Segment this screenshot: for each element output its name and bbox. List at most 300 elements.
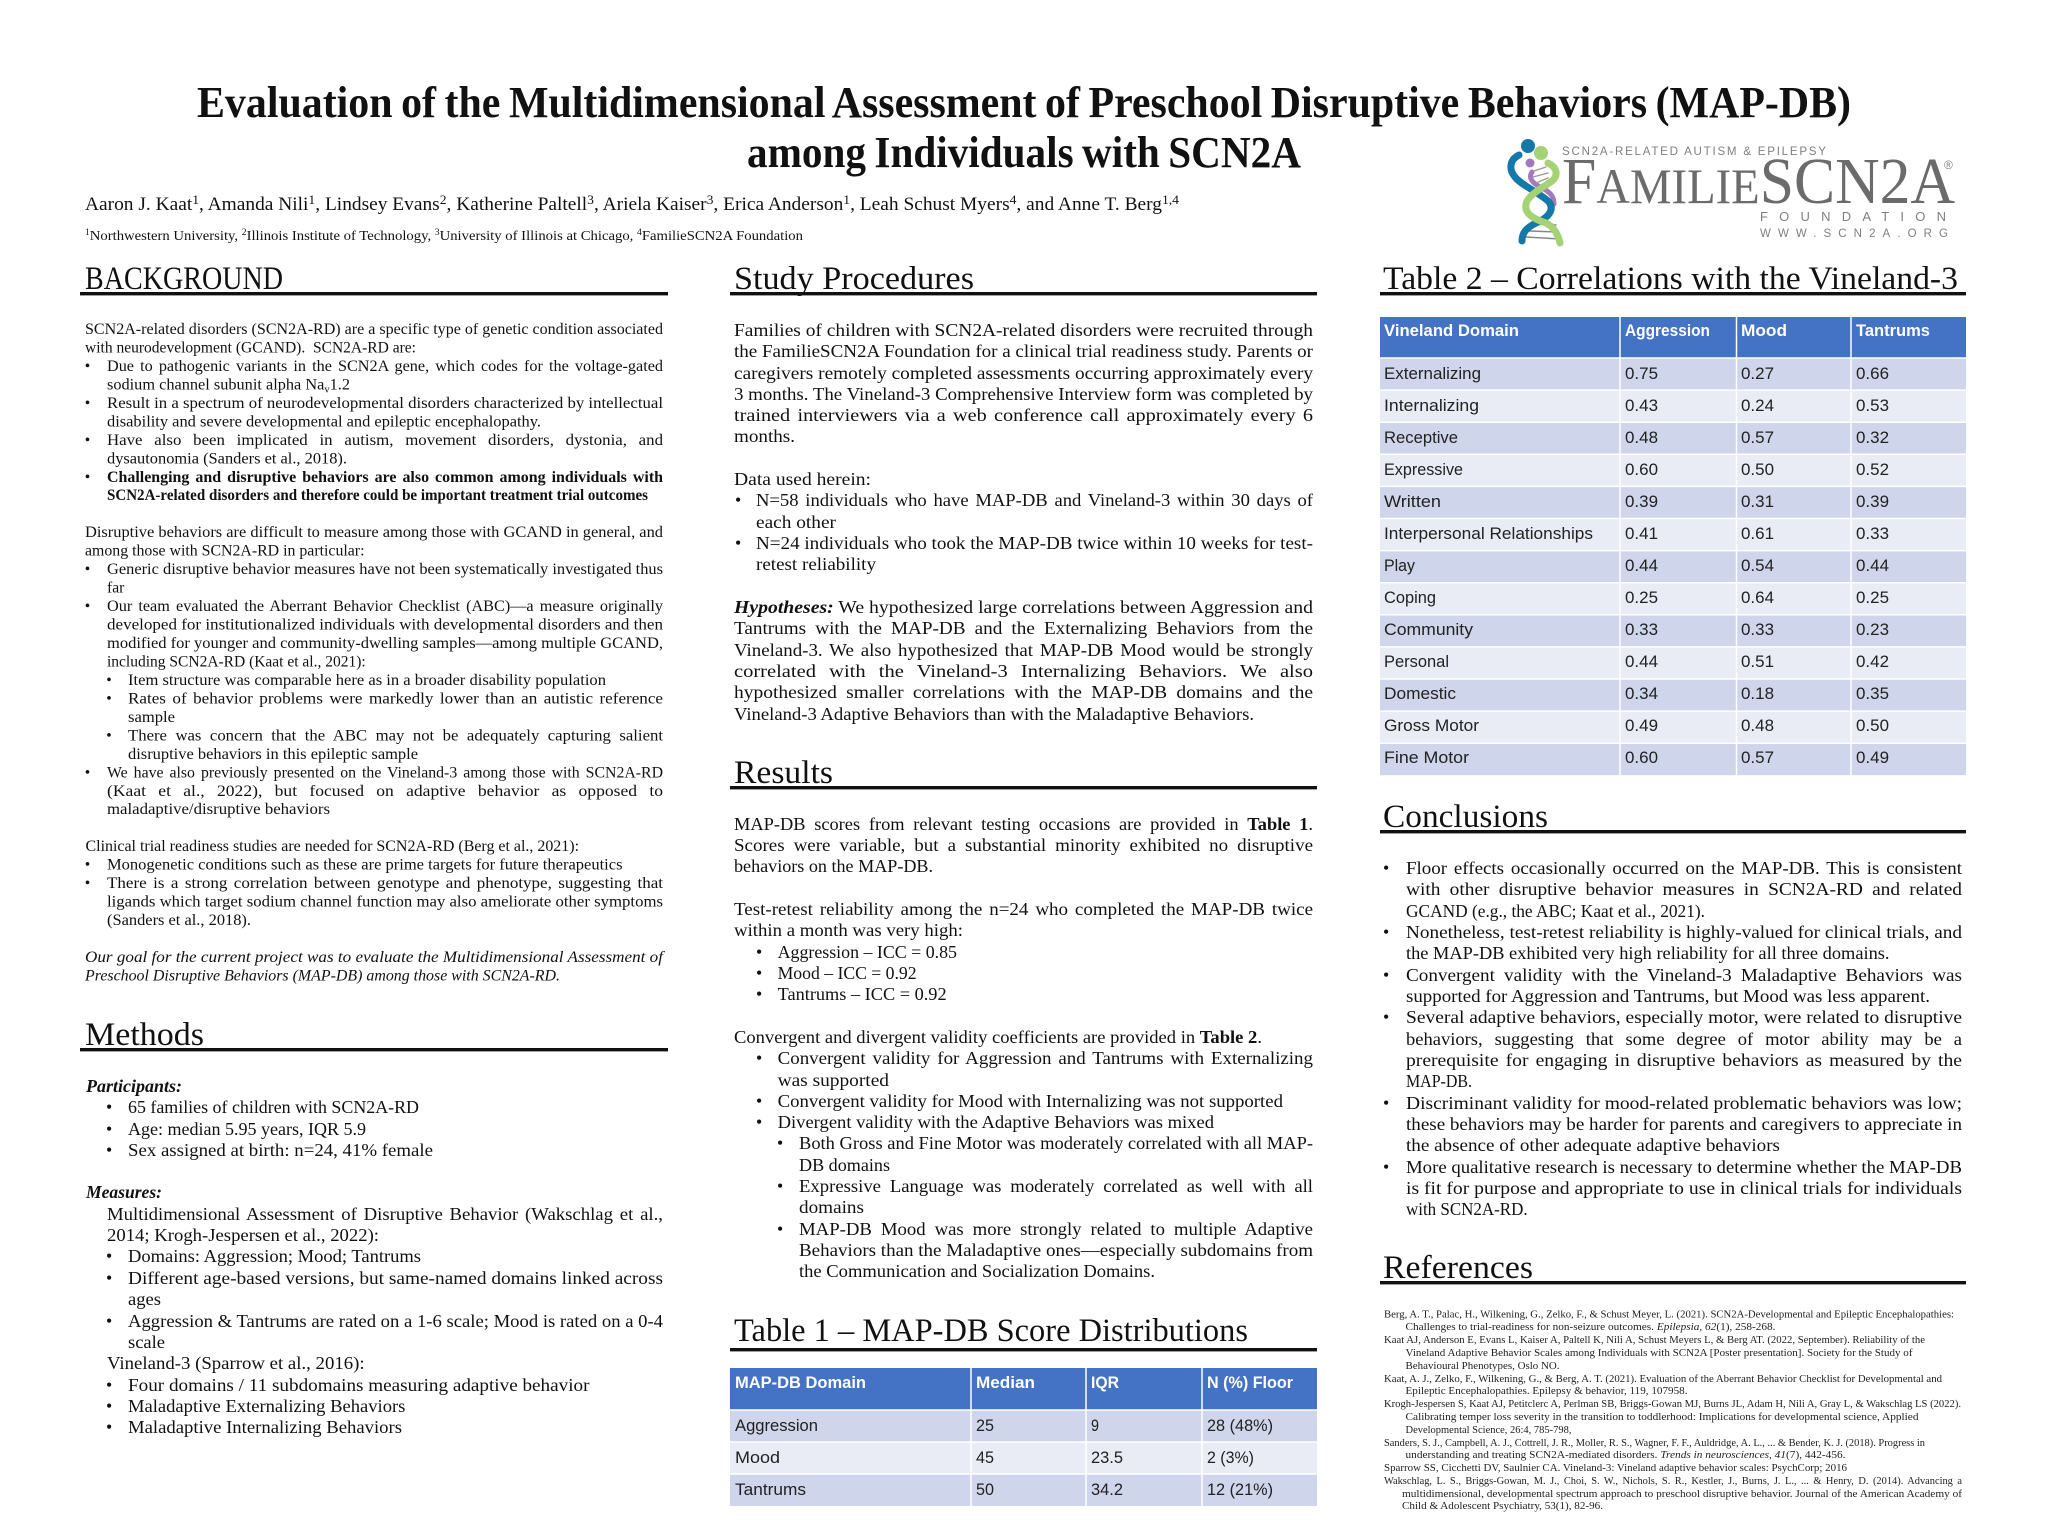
table: correlations with the Vineland-3: 0.18	[1741, 684, 1774, 703]
text block: test-retest reliability: Aggression – ICC = 0.85	[778, 942, 957, 962]
table: correlations with the Vineland-3: 0.43	[1625, 396, 1658, 415]
authors: 1	[308, 192, 315, 207]
text block: reference list: Behavioural Phenotypes, Oslo NO.	[1406, 1360, 1560, 1372]
heading: background: BACKGROUND	[85, 261, 283, 297]
text block: conclusions list: the MAP-DB exhibited very high reliability for all three domains.	[1406, 943, 1890, 963]
text block: reference list: Calibrating temper loss severity in the transition to toddlerhood: Implications for developmental science, Applied	[1406, 1411, 1919, 1423]
text block: measuring disruptive behaviors: •	[85, 764, 90, 781]
text block: conclusions list: supported for Aggression and Tantrums, but Mood was less apparent.	[1406, 986, 1930, 1006]
text block: conclusions list: •	[1383, 858, 1389, 878]
table: correlations with the Vineland-3: 0.49	[1856, 748, 1889, 767]
text block: SCN2A-RD overview: v	[324, 384, 330, 395]
text block: SCN2A-RD overview: with neurodevelopment (GCAND). SCN2A-RD are:	[85, 340, 416, 356]
logo: FamilieSCN2A Foundation	[1511, 139, 1955, 243]
affiliations: 3	[435, 227, 440, 237]
text block: reference list: Krogh-Jespersen S, Kaat AJ, Petitclerc A, Perlman SB, Briggs-Gowan MJ, Burns JL, Adam H, Nili A, Gray L, & Wakschlag LS (2022).	[1384, 1398, 1961, 1410]
text block: test-retest reliability: Test-retest reliability among the n=24 who completed the MAP-DB twice	[734, 899, 1313, 919]
text block: measures: •	[106, 1375, 112, 1395]
text block: project goal: Our goal for the current project was to evaluate the Multidimensional Assessment of	[85, 949, 666, 966]
text block: reference list: Epileptic Encephalopathies. Epilepsy & behavior, 119, 107958.	[1406, 1385, 1688, 1397]
authors: , Erica Anderson	[713, 195, 843, 215]
text block: validity coefficients: Convergent validity for Aggression and Tantrums with Externalizing	[778, 1048, 1313, 1068]
authors: Aaron J. Kaat	[85, 195, 187, 215]
heading: background	[80, 261, 668, 297]
text block: reference list: Challenges to trial-readiness for non-seizure outcomes. Epilepsia, 62(1), 258-268.	[1406, 1321, 1776, 1333]
text block: measuring disruptive behaviors: •	[106, 672, 112, 689]
text block: test-retest reliability: Mood – ICC = 0.92	[778, 963, 917, 983]
table: correlations with the Vineland-3: 0.48	[1625, 428, 1658, 447]
authors: 1	[843, 192, 850, 207]
text block: conclusions list	[1383, 858, 1962, 1219]
text block: SCN2A-RD overview: •	[85, 469, 90, 486]
text block: SCN2A-RD overview: •	[85, 432, 90, 449]
text block: conclusions list: behaviors, suggesting that some degree of motor ability may be a	[1406, 1029, 1962, 1049]
text block: measuring disruptive behaviors: modified for younger and community-dwelling samples—among multiple GCAND,	[107, 635, 663, 652]
text block: study description: caregivers remotely completed assessments occurring approximately every	[734, 363, 1313, 383]
text block: participants: Age: median 5.95 years, IQR 5.9	[128, 1119, 366, 1139]
affiliations: University of Illinois at Chicago,	[440, 228, 637, 243]
logo wordmark: FAMILIESCN2A	[1562, 145, 1955, 218]
table: correlations with the Vineland-3: Coping	[1384, 588, 1436, 607]
panel: background	[80, 261, 668, 984]
text block: validity coefficients: Divergent validity with the Adaptive Behaviors was mixed	[778, 1112, 1214, 1132]
table: correlations with the Vineland-3: Community	[1384, 620, 1474, 639]
text block: test-retest reliability: Tantrums – ICC = 0.92	[778, 984, 947, 1004]
table: correlations with the Vineland-3: Mood	[1741, 321, 1787, 340]
text block: measuring disruptive behaviors: developed for institutionalized individuals with developmental disorders and then	[107, 616, 663, 634]
text block: measuring disruptive behaviors: •	[106, 690, 112, 707]
table: MAP-DB score distributions: 50	[976, 1480, 994, 1499]
table: correlations with the Vineland-3: 0.57	[1741, 748, 1774, 767]
text block: data used	[734, 469, 1313, 574]
text block: validity coefficients	[734, 1027, 1313, 1281]
text block: SCN2A-RD overview: disability and severe developmental and epileptic encephalopathy.	[107, 413, 541, 430]
text block: SCN2A-RD overview: SCN2A-related disorders and therefore could be important treatment trial outcomes	[107, 487, 648, 504]
text block: reference list: Wakschlag, L. S., Briggs-Gowan, M. J., Choi, S. W., Nichols, S. R., Kestler, J., Burns, J. L., ... & Henry, D. (2014). Advancing a	[1384, 1475, 1962, 1487]
text block: conclusions list: •	[1383, 965, 1389, 985]
text block: reference list: Kaat, A. J., Zelko, F., Wilkening, G., & Berg, A. T. (2021). Evaluation of the Aberrant Behavior Checklist for Developmental and	[1384, 1373, 1942, 1385]
affiliations	[85, 227, 803, 243]
text block: project goal	[84, 949, 666, 984]
text block: measures: •	[106, 1311, 112, 1331]
text block: study description: the FamilieSCN2A Foundation for a clinical trial readiness study. Parents or	[734, 341, 1313, 361]
text block: conclusions list: Floor effects occasionally occurred on the MAP-DB. This is consistent	[1406, 858, 1962, 878]
text block: measuring disruptive behaviors: Item structure was comparable here as in a broader disability population	[128, 672, 606, 689]
text block: validity coefficients: domains	[799, 1197, 864, 1217]
title	[197, 78, 1851, 177]
text block: reference list: Sparrow SS, Cicchetti DV, Saulnier CA. Vineland-3: Vineland adaptive behavior scales: PsychCorp; 2016	[1384, 1462, 1847, 1474]
table: correlations with the Vineland-3: Interpersonal Relationships	[1384, 524, 1593, 543]
table: correlations with the Vineland-3: 0.49	[1625, 716, 1658, 735]
text block: participants: Participants:	[85, 1076, 182, 1096]
text block: measures: scale	[128, 1332, 165, 1352]
text block: test-retest reliability: •	[756, 963, 762, 983]
table: MAP-DB score distributions: 2 (3%)	[1207, 1448, 1254, 1467]
table: correlations with the Vineland-3: Personal	[1384, 652, 1449, 671]
table: correlations with the Vineland-3: Receptive	[1384, 428, 1458, 447]
table: correlations with the Vineland-3: Domestic	[1384, 684, 1456, 703]
heading: study procedures: Study Procedures	[734, 261, 974, 297]
text block: measuring disruptive behaviors: •	[106, 727, 112, 744]
table: correlations with the Vineland-3: 0.27	[1741, 364, 1774, 383]
heading: references	[1380, 1250, 1966, 1286]
table: correlations with the Vineland-3: 0.61	[1741, 524, 1774, 543]
text block: measuring disruptive behaviors: Rates of behavior problems were markedly lower than an autistic reference	[128, 690, 663, 707]
text block: reference list: multidimensional, developmental spectrum approach to preschool disruptive behavior. Journal of the American Academy of	[1402, 1488, 1962, 1500]
text block: measures: •	[106, 1246, 112, 1266]
table: correlations with the Vineland-3: 0.23	[1856, 620, 1889, 639]
text block: measuring disruptive behaviors: •	[85, 561, 90, 578]
text block: validity coefficients: •	[756, 1091, 762, 1111]
table: correlations with the Vineland-3: 0.35	[1856, 684, 1889, 703]
text block: measuring disruptive behaviors: among those with SCN2A-RD in particular:	[85, 543, 364, 560]
text block: data used: each other	[756, 512, 836, 532]
text block: SCN2A-RD overview	[85, 321, 664, 504]
text block: measures: Aggression & Tantrums are rated on a 1-6 scale; Mood is rated on a 0-4	[128, 1311, 663, 1331]
text block: measuring disruptive behaviors: Our team evaluated the Aberrant Behavior Checklist (ABC)—a measure originally	[107, 598, 663, 615]
text block: conclusions list: •	[1383, 922, 1389, 942]
text block: validity coefficients: Behaviors than the Maladaptive ones—especially subdomains from	[799, 1240, 1313, 1260]
affiliations: 1	[85, 227, 90, 237]
table: correlations with the Vineland-3: Internalizing	[1384, 396, 1479, 415]
text block: data used: N=24 individuals who took the MAP-DB twice within 10 weeks for test-	[756, 533, 1313, 553]
text block: measures	[85, 1182, 663, 1437]
text block: validity coefficients: the Communication and Socialization Domains.	[799, 1261, 1155, 1281]
panel: study procedures	[730, 261, 1317, 724]
text block: measures: 2014; Krogh-Jespersen et al., 2022):	[107, 1225, 379, 1246]
table: MAP-DB score distributions	[730, 1368, 1317, 1506]
table: correlations with the Vineland-3: 0.53	[1856, 396, 1889, 415]
text block: SCN2A-RD overview: Challenging and disruptive behaviors are also common among individuals with	[107, 469, 663, 486]
table: correlations with the Vineland-3: Gross Motor	[1384, 716, 1479, 735]
text block: conclusions list: More qualitative research is necessary to determine whether the MAP-DB	[1406, 1157, 1962, 1177]
heading: conclusions	[1380, 799, 1966, 835]
text block: measures: Maladaptive Externalizing Behaviors	[128, 1396, 405, 1416]
text block: conclusions list: is fit for purpose and appropriate to use in clinical trials for individuals	[1406, 1178, 1962, 1198]
text block: measuring disruptive behaviors: We have also previously presented on the Vineland-3 among those with SCN2A-RD	[107, 764, 663, 781]
logo registered mark: ®	[1944, 158, 1953, 172]
table: correlations with the Vineland-3: Expressive	[1384, 460, 1463, 479]
text block: test-retest reliability: within a month was very high:	[734, 920, 963, 940]
table: correlations with the Vineland-3: 0.44	[1625, 652, 1658, 671]
text block: conclusions list: •	[1383, 1093, 1389, 1113]
text block: data used: •	[735, 490, 741, 510]
affiliations: FamilieSCN2A Foundation	[642, 228, 803, 243]
text block: hypotheses: correlated with the Vineland-3 Internalizing Behaviors. We also	[734, 661, 1313, 681]
text block: validity coefficients: DB domains	[799, 1155, 890, 1175]
text block: conclusions list: with SCN2A-RD.	[1406, 1199, 1528, 1219]
text block: reference list: Kaat AJ, Anderson E, Evans L, Kaiser A, Paltell K, Nili A, Schust Meyers L, & Berg AT. (2022, September). Reliability of the	[1384, 1334, 1925, 1346]
text block: validity coefficients: •	[777, 1219, 783, 1239]
text block: participants: 65 families of children with SCN2A-RD	[128, 1097, 419, 1117]
authors: 1,4	[1162, 192, 1180, 207]
table: correlations with the Vineland-3: Aggression	[1625, 321, 1710, 340]
text block: study description: months.	[734, 426, 795, 446]
text block: hypotheses: Hypotheses: We hypothesized large correlations between Aggression and	[733, 597, 1313, 617]
text block: conclusions list: Discriminant validity for mood-related problematic behaviors was low;	[1406, 1093, 1962, 1113]
text block: validity coefficients: Both Gross and Fine Motor was moderately correlated with all MAP-	[799, 1133, 1313, 1153]
authors	[85, 192, 1180, 215]
logo foundation line: FOUNDATION	[1760, 209, 1946, 224]
authors: , Lindsey Evans	[315, 195, 440, 215]
text block: participants: •	[106, 1140, 112, 1160]
text block: clinical trial readiness: ligands which target sodium channel function may also ameliorate other symptoms	[107, 894, 663, 911]
table: correlations with the Vineland-3: 0.48	[1741, 716, 1774, 735]
table: correlations with the Vineland-3: 0.25	[1625, 588, 1658, 607]
table: correlations with the Vineland-3: 0.39	[1856, 492, 1889, 511]
text block: measures: Four domains / 11 subdomains measuring adaptive behavior	[128, 1375, 590, 1395]
text block: validity coefficients: Expressive Language was moderately correlated as well with all	[799, 1176, 1313, 1196]
text block: conclusions list: the absence of other adequate adaptive behaviors	[1406, 1135, 1780, 1155]
table: correlations with the Vineland-3: Vineland Domain	[1384, 321, 1519, 340]
text block: clinical trial readiness: (Sanders et al., 2018).	[107, 912, 251, 929]
text block: hypotheses: Tantrums with the MAP-DB and the Externalizing Behaviors from the	[734, 618, 1313, 638]
text block: validity coefficients: MAP-DB Mood was more strongly related to multiple Adaptive	[799, 1219, 1313, 1239]
authors: , Leah Schust Myers	[850, 195, 1010, 215]
panel: table 1	[730, 1313, 1317, 1506]
panel: references	[1380, 1250, 1966, 1512]
table: MAP-DB score distributions: Median	[976, 1373, 1035, 1392]
text block: SCN2A-RD overview: SCN2A-related disorders (SCN2A-RD) are a specific type of genetic condition associated	[85, 321, 663, 338]
authors: 4	[1010, 192, 1017, 207]
authors: 2	[440, 192, 447, 207]
table: correlations with the Vineland-3: 0.33	[1856, 524, 1889, 543]
table: correlations with the Vineland-3: 0.25	[1856, 588, 1889, 607]
text block: measuring disruptive behaviors: •	[85, 598, 90, 615]
table: correlations with the Vineland-3: 0.60	[1625, 460, 1658, 479]
text block: SCN2A-RD overview: Due to pathogenic variants in the SCN2A gene, which codes for the voltage-gated	[107, 358, 663, 375]
text block: reference list: Developmental Science, 26:4, 785-798,	[1406, 1424, 1572, 1436]
text block: validity coefficients: •	[756, 1048, 762, 1068]
table: correlations with the Vineland-3: 0.50	[1856, 716, 1889, 735]
table: correlations with the Vineland-3: 0.57	[1741, 428, 1774, 447]
text block: data used: •	[735, 533, 741, 553]
text block: measuring disruptive behaviors: Generic disruptive behavior measures have not been systematically investigated thus	[107, 561, 663, 578]
panel: table 2	[1380, 261, 1966, 775]
text block: measuring disruptive behaviors: maladaptive/disruptive behaviors	[107, 801, 330, 818]
text block: score summary: behaviors on the MAP-DB.	[734, 856, 933, 876]
authors: , Ariela Kaiser	[594, 195, 707, 215]
text block: conclusions list: prerequisite for engaging in disruptive behaviors as measured by the	[1406, 1050, 1962, 1070]
text block: conclusions list: GCAND (e.g., the ABC; Kaat et al., 2021).	[1406, 901, 1705, 922]
table: correlations with the Vineland-3: 0.44	[1625, 556, 1658, 575]
text block: measuring disruptive behaviors: There was concern that the ABC may not be adequately capturing salient	[128, 727, 664, 744]
authors: 3	[587, 192, 594, 207]
table: correlations with the Vineland-3: 0.24	[1741, 396, 1774, 415]
text block: conclusions list: with other disruptive behavior measures in SCN2A-RD and related	[1406, 879, 1962, 899]
table: MAP-DB score distributions: Mood	[735, 1448, 780, 1467]
text block: project goal: Preschool Disruptive Behaviors (MAP-DB) among those with SCN2A-RD.	[84, 968, 560, 984]
logo website: WWW.SCN2A.ORG	[1760, 228, 1948, 240]
text block: participants	[85, 1076, 433, 1160]
text block: reference list: Berg, A. T., Palac, H., Wilkening, G., Zelko, F., & Schust Meyer, L. (2021). SCN2A-Developmental and Epileptic Encephalopathies:	[1384, 1308, 1954, 1320]
text block: measures: Different age-based versions, but same-named domains linked across	[128, 1268, 663, 1288]
text block: measures: Measures:	[85, 1182, 162, 1202]
table: MAP-DB score distributions: IQR	[1091, 1373, 1119, 1392]
text block: hypotheses: Vineland-3 Adaptive Behaviors than with the Maladaptive Behaviors.	[734, 704, 1254, 724]
text block: test-retest reliability	[734, 899, 1313, 1004]
text block: test-retest reliability: •	[756, 984, 762, 1004]
table: correlations with the Vineland-3: 0.42	[1856, 652, 1889, 671]
text block: test-retest reliability: •	[756, 942, 762, 962]
text block: validity coefficients: •	[777, 1176, 783, 1196]
text block: measuring disruptive behaviors	[85, 524, 664, 818]
text block: conclusions list: •	[1383, 1157, 1389, 1177]
table: correlations with the Vineland-3: 0.41	[1625, 524, 1658, 543]
text block: clinical trial readiness: •	[85, 875, 90, 892]
text block: measuring disruptive behaviors: sample	[128, 709, 175, 726]
text block: SCN2A-RD overview: •	[85, 358, 90, 375]
text block: measuring disruptive behaviors: far	[107, 580, 125, 597]
text block: clinical trial readiness: •	[85, 857, 90, 874]
text block: participants: Sex assigned at birth: n=24, 41% female	[128, 1140, 433, 1160]
text block: measures: Multidimensional Assessment of Disruptive Behavior (Wakschlag et al.,	[107, 1204, 663, 1225]
text block: measures: ages	[128, 1289, 161, 1309]
table: correlations with the Vineland-3: 0.39	[1625, 492, 1658, 511]
table: correlations with the Vineland-3: 0.75	[1625, 364, 1658, 383]
table: correlations with the Vineland-3: Play	[1384, 556, 1415, 575]
text block: score summary: Scores were variable, but a substantial minority exhibited no disruptive	[734, 835, 1313, 855]
heading: table 2: Table 2 – Correlations with the Vineland-3	[1383, 261, 1958, 297]
heading: results: Results	[734, 755, 833, 791]
table: correlations with the Vineland-3: 0.64	[1741, 588, 1774, 607]
table: MAP-DB score distributions: 25	[976, 1416, 994, 1435]
heading: references: References	[1383, 1250, 1533, 1286]
title: among Individuals with SCN2A	[747, 128, 1301, 177]
text block: conclusions list: Convergent validity with the Vineland-3 Maladaptive Behaviors was	[1406, 965, 1962, 985]
text block: measures: •	[106, 1396, 112, 1416]
table: MAP-DB score distributions: MAP-DB Domain	[735, 1373, 866, 1392]
text block: conclusions list: these behaviors may be harder for parents and caregivers to appreciate in	[1406, 1114, 1962, 1134]
panel: conclusions	[1380, 799, 1966, 1219]
text block: participants: •	[106, 1097, 112, 1117]
affiliations: Northwestern University,	[90, 228, 242, 243]
text block: measures: •	[106, 1417, 112, 1437]
panel: methods	[80, 1017, 668, 1437]
text block: measuring disruptive behaviors: Disruptive behaviors are difficult to measure among those with GCAND in general, and	[85, 524, 663, 541]
text block: SCN2A-RD overview: 1.2	[330, 376, 350, 393]
text block: reference list: Vineland Adaptive Behavior Scales among Individuals with SCN2A [Poster presentation]. Society for the Study of	[1406, 1347, 1913, 1359]
authors: , and Anne T. Berg	[1016, 195, 1162, 215]
text block: clinical trial readiness: Clinical trial readiness studies are needed for SCN2A-RD (Berg et al., 2021):	[86, 838, 579, 855]
authors: , Amanda Nili	[199, 195, 308, 215]
table: MAP-DB score distributions: 34.2	[1091, 1480, 1123, 1499]
heading: results	[730, 755, 1317, 791]
text block: clinical trial readiness	[85, 838, 664, 929]
text block: validity coefficients: •	[756, 1112, 762, 1132]
table: correlations with the Vineland-3: Tantrums	[1856, 321, 1930, 340]
text block: measures: •	[106, 1268, 112, 1288]
text block: validity coefficients: •	[777, 1133, 783, 1153]
table: MAP-DB score distributions: 9	[1091, 1416, 1099, 1435]
text block: SCN2A-RD overview: Result in a spectrum of neurodevelopmental disorders characterized by intellectual	[107, 395, 664, 412]
text block: data used: retest reliability	[756, 554, 876, 574]
table: correlations with the Vineland-3: Fine Motor	[1384, 748, 1469, 767]
text block: SCN2A-RD overview: dysautonomia (Sanders et al., 2018).	[107, 450, 347, 467]
text block: data used: Data used herein:	[734, 469, 871, 489]
text block: validity coefficients: Convergent and divergent validity coefficients are provided in Table 2.	[734, 1027, 1262, 1047]
text block: SCN2A-RD overview: Have also been implicated in autism, movement disorders, dystonia, and	[107, 432, 663, 449]
affiliations: 4	[637, 227, 642, 237]
text block: clinical trial readiness: There is a strong correlation between genotype and phenotype, suggesting that	[107, 875, 664, 892]
text block: reference list: Child & Adolescent Psychiatry, 53(1), 82-96.	[1402, 1500, 1603, 1512]
text block: study description: trained interviewers via a web conference call approximately every 6	[734, 405, 1313, 425]
table: correlations with the Vineland-3: Written	[1384, 492, 1441, 511]
text block: conclusions list: Nonetheless, test-retest reliability is highly-valued for clinical trials, and	[1406, 922, 1962, 942]
table: MAP-DB score distributions: 12 (21%)	[1207, 1480, 1273, 1499]
text block: SCN2A-RD overview: sodium channel subunit alpha Na	[107, 376, 315, 393]
text block: participants: •	[106, 1119, 112, 1139]
table: correlations with the Vineland-3: 0.52	[1856, 460, 1889, 479]
authors: 1	[192, 192, 199, 207]
heading: conclusions: Conclusions	[1383, 799, 1548, 835]
text block: data used: N=58 individuals who have MAP-DB and Vineland-3 within 30 days of	[756, 490, 1313, 510]
heading: methods	[80, 1017, 668, 1053]
table: correlations with the Vineland-3: 0.44	[1856, 556, 1889, 575]
text block: hypotheses: hypothesized smaller correlations with the MAP-DB domains and the	[734, 682, 1313, 702]
text block: study description: 3 months. The Vineland-3 Comprehensive Interview form was completed by	[734, 384, 1313, 404]
text block: reference list: understanding and treating SCN2A-mediated disorders. Trends in neurosciences, 41 (7), 442-456.	[1406, 1449, 1846, 1461]
table: correlations with the Vineland-3: 0.31	[1741, 492, 1774, 511]
authors: 3	[707, 192, 713, 207]
table: correlations with the Vineland-3: 0.60	[1625, 748, 1658, 767]
affiliations: 2	[242, 227, 247, 237]
title: Evaluation of the Multidimensional Assessment of Preschool Disruptive Behaviors (MAP-DB)	[197, 78, 1851, 127]
text block: reference list: Sanders, S. J., Campbell, A. J., Cottrell, J. R., Moller, R. S., Wagner, F. F., Auldridge, A. L., ... & Bender, K. J. (2018). Progress in	[1384, 1437, 1925, 1449]
text block: score summary: MAP-DB scores from relevant testing occasions are provided in Table 1.	[734, 814, 1313, 834]
text block: measuring disruptive behaviors: disruptive behaviors in this epileptic sample	[128, 746, 418, 763]
text block: score summary	[734, 814, 1313, 876]
authors: , Katherine Paltell	[447, 195, 587, 215]
table: correlations with the Vineland-3: 0.54	[1741, 556, 1774, 575]
text block: validity coefficients: Convergent validity for Mood with Internalizing was not supported	[778, 1091, 1283, 1111]
heading: methods: Methods	[85, 1017, 204, 1053]
text block: conclusions list: MAP-DB.	[1406, 1071, 1472, 1091]
heading: table 1: Table 1 – MAP-DB Score Distributions	[734, 1313, 1248, 1349]
text block: hypotheses: Vineland-3. We also hypothesized that MAP-DB Mood would be strongly	[734, 640, 1313, 660]
text block: conclusions list: Several adaptive behaviors, especially motor, were related to disruptive	[1406, 1007, 1962, 1027]
table: MAP-DB score distributions: 23.5	[1091, 1448, 1123, 1467]
text block: hypotheses	[733, 597, 1313, 724]
table: correlations with the Vineland-3: Externalizing	[1384, 364, 1481, 383]
text block: measures: Vineland-3 (Sparrow et al., 2016):	[107, 1353, 365, 1374]
text block: measures: Domains: Aggression; Mood; Tantrums	[128, 1246, 421, 1266]
panel: results	[730, 755, 1317, 1281]
text block: measuring disruptive behaviors: (Kaat et al., 2022), but focused on adaptive behavior as opposed to	[107, 783, 663, 800]
text block: measures: Maladaptive Internalizing Behaviors	[128, 1417, 402, 1437]
text block: study description: Families of children with SCN2A-related disorders were recruited through	[734, 320, 1313, 340]
table: MAP-DB score distributions: 45	[976, 1448, 994, 1467]
table: correlations with the Vineland-3	[1380, 317, 1966, 775]
table: MAP-DB score distributions: Tantrums	[735, 1480, 806, 1499]
table: MAP-DB score distributions: 28 (48%)	[1207, 1416, 1273, 1435]
icon: family DNA helix	[1511, 139, 1560, 243]
table: correlations with the Vineland-3: 0.33	[1741, 620, 1774, 639]
text block: measuring disruptive behaviors: including SCN2A-RD (Kaat et al., 2021):	[107, 654, 366, 670]
text block: reference list	[1384, 1308, 1962, 1512]
table: correlations with the Vineland-3: 0.50	[1741, 460, 1774, 479]
heading: study procedures	[730, 261, 1317, 297]
table: correlations with the Vineland-3: 0.34	[1625, 684, 1658, 703]
text block: study description	[734, 320, 1313, 446]
text block: SCN2A-RD overview: •	[85, 395, 90, 412]
text block: clinical trial readiness: Monogenetic conditions such as these are prime targets for future therapeutics	[107, 857, 622, 874]
table: correlations with the Vineland-3: 0.33	[1625, 620, 1658, 639]
table: MAP-DB score distributions: N (%) Floor	[1207, 1373, 1293, 1392]
table: correlations with the Vineland-3: 0.51	[1741, 652, 1774, 671]
table: correlations with the Vineland-3: 0.32	[1856, 428, 1889, 447]
text block: validity coefficients: was supported	[778, 1070, 889, 1090]
